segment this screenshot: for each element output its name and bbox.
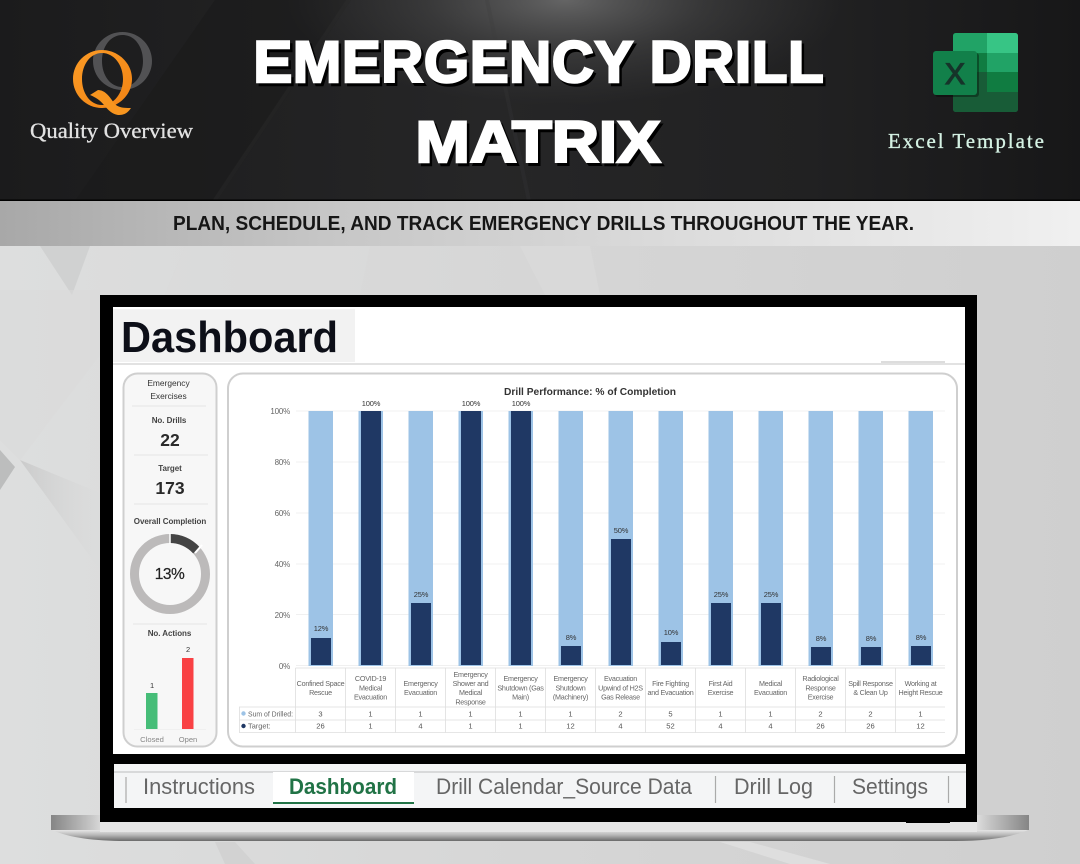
stat: number of drills: No. Drills <box>152 416 187 425</box>
data table <box>239 668 945 732</box>
bar: closed actions: Closed <box>140 735 164 744</box>
icon: grey Q ring <box>93 32 152 90</box>
legend row: target: 4 <box>718 722 723 730</box>
data labels: 25% <box>764 590 779 599</box>
legend row: sum of drilled: 2 <box>618 710 623 718</box>
category labels: COVID-19 <box>355 674 386 683</box>
category labels: Exercise <box>808 692 834 702</box>
tab: Dashboard (active) <box>273 772 414 804</box>
stat: number of drills: 22 <box>160 430 180 450</box>
category labels: Radiological <box>802 674 839 683</box>
category labels <box>297 670 943 706</box>
y axis and gridlines: 40% <box>275 560 290 569</box>
data labels: 8% <box>916 633 927 642</box>
bar chart: number of actions: No. Actions <box>148 629 192 638</box>
category labels: Medical <box>759 679 783 688</box>
legend row: sum of drilled: 1 <box>418 710 423 718</box>
data labels: 8% <box>566 633 577 642</box>
legend row: sum of drilled: 1 <box>468 710 473 718</box>
category labels: Shower and <box>453 679 489 688</box>
legend row: sum of drilled: Sum of Drilled: <box>248 710 293 718</box>
target bars (light blue) <box>308 411 933 666</box>
category labels: Response <box>805 684 836 692</box>
legend row: sum of drilled: 1 <box>368 710 373 718</box>
legend row: sum of drilled: 1 <box>718 710 723 718</box>
category labels: Shutdown <box>556 684 586 692</box>
category labels: Gas Release <box>601 692 640 702</box>
data labels: 100% <box>512 399 531 408</box>
legend row: sum of drilled: 2 <box>818 710 823 718</box>
category labels: Emergency <box>403 679 438 688</box>
data labels: 50% <box>614 526 629 535</box>
bar: closed actions <box>140 681 164 744</box>
data labels: 100% <box>462 399 481 408</box>
bar chart: number of actions <box>134 629 206 744</box>
title: EMERGENCY DRILL <box>256 33 826 98</box>
category labels: Medical <box>359 684 383 692</box>
category labels: & Clean Up <box>853 688 888 697</box>
legend row: sum of drilled: 3 <box>318 710 323 718</box>
icon: orange Q ring <box>73 50 132 115</box>
legend row: target <box>241 722 925 730</box>
category labels: Evacuation <box>754 688 787 697</box>
category labels: Upwind of H2S <box>598 684 643 692</box>
legend row: target: 52 <box>666 722 675 730</box>
panel: summary sidebar <box>124 374 216 746</box>
worksheet tab bar <box>114 764 966 808</box>
category labels: Emergency <box>503 674 538 683</box>
category labels: Evacuation <box>404 688 437 697</box>
category labels: Exercise <box>708 688 734 697</box>
category labels: Shutdown (Gas <box>497 684 544 692</box>
donut chart: overall completion: 13% <box>155 566 185 583</box>
legend row: target: Target: <box>248 722 271 730</box>
legend row: sum of drilled <box>241 710 923 718</box>
title: MATRIX <box>418 113 663 178</box>
data labels: 8% <box>866 634 877 643</box>
icon: Excel logo <box>933 33 1018 112</box>
page background <box>0 246 1080 864</box>
bar: open actions: 2 <box>186 645 190 654</box>
laptop screen frame <box>100 295 977 823</box>
y axis and gridlines: 80% <box>275 458 290 467</box>
data labels: 25% <box>714 590 729 599</box>
y axis and gridlines: 100% <box>270 407 290 416</box>
data labels: 10% <box>664 628 679 637</box>
donut chart: overall completion: Overall Completion <box>134 517 206 526</box>
tab: Instructions: Instructions <box>143 774 255 799</box>
category labels: First Aid <box>709 679 733 688</box>
legend row: sum of drilled: 2 <box>868 710 873 718</box>
category labels: Fire Fighting <box>652 679 689 688</box>
category labels: Emergency <box>553 674 588 683</box>
legend row: sum of drilled: 1 <box>918 710 923 718</box>
legend row: sum of drilled: 1 <box>568 710 573 718</box>
title: MATRIX <box>416 110 661 175</box>
stat: target: 173 <box>155 478 185 498</box>
y axis and gridlines: 20% <box>275 611 290 620</box>
legend row: target: 12 <box>916 722 925 730</box>
sidebar heading: Emergency <box>147 378 190 388</box>
category labels: Evacuation <box>604 674 637 683</box>
stat: target: Target <box>158 464 182 473</box>
icon: Excel logo: X <box>945 58 965 91</box>
tab: Settings: Settings <box>852 774 928 799</box>
category labels: Height Rescue <box>899 688 943 697</box>
category labels: Response <box>455 698 486 706</box>
stat: number of drills <box>152 416 187 450</box>
y axis and gridlines <box>270 407 945 671</box>
legend row: sum of drilled: 1 <box>768 710 773 718</box>
tab: Dashboard (active): Dashboard <box>289 774 397 799</box>
legend row: target: 26 <box>866 722 875 730</box>
legend row: target: 26 <box>316 722 325 730</box>
completed bars (navy) <box>311 411 931 665</box>
category labels: and Evacuation <box>647 688 694 697</box>
dashboard heading <box>113 309 965 364</box>
dashboard heading: Dashboard <box>121 313 338 362</box>
bar: closed actions: 1 <box>150 681 154 690</box>
category labels: (Machinery) <box>553 692 588 702</box>
category labels: Main) <box>512 692 529 702</box>
logo: Quality Overview <box>30 32 193 143</box>
legend row: sum of drilled: 5 <box>668 710 673 718</box>
subtitle band <box>0 201 1080 246</box>
data labels <box>314 399 927 643</box>
header banner <box>0 0 1080 201</box>
category labels: Evacuation <box>354 692 387 702</box>
data labels: 12% <box>314 624 329 633</box>
legend row: target: 1 <box>368 722 373 730</box>
data labels: 8% <box>816 634 827 643</box>
y axis and gridlines: 60% <box>275 509 290 518</box>
legend row: target: 26 <box>816 722 825 730</box>
category labels: Working at <box>905 679 937 688</box>
data labels: 25% <box>414 590 429 599</box>
title: EMERGENCY DRILL <box>254 30 824 95</box>
bar: open actions <box>179 645 197 744</box>
subtitle band: PLAN, SCHEDULE, AND TRACK EMERGENCY DRILLS THROUGHOUT THE YEAR. <box>173 213 914 235</box>
legend row: target: 4 <box>418 722 423 730</box>
category labels: Medical <box>459 688 483 697</box>
chart title: Drill Performance: % of Completion <box>504 386 676 398</box>
category labels: Spill Response <box>848 679 893 688</box>
donut chart: overall completion <box>134 517 206 610</box>
legend row: target: 12 <box>566 722 575 730</box>
legend row: sum of drilled: 1 <box>518 710 523 718</box>
category labels: Emergency <box>453 670 488 679</box>
category labels: Rescue <box>309 688 332 697</box>
category labels: Confined Space <box>297 679 345 688</box>
logo wordmark: Quality Overview <box>30 118 193 143</box>
Excel Template label: Excel Template <box>888 129 1044 153</box>
tab: Drill Calendar_Source Data: Drill Calendar_Source Data <box>436 774 693 799</box>
y axis and gridlines: 0% <box>279 662 290 671</box>
bar: open actions: Open <box>179 735 197 744</box>
legend row: target: 1 <box>468 722 473 730</box>
data labels: 100% <box>362 399 381 408</box>
laptop base <box>51 815 1029 841</box>
sidebar heading: Exercises <box>150 391 187 401</box>
title <box>254 30 826 178</box>
panel: drill performance chart <box>228 374 957 746</box>
stat: target <box>155 464 185 498</box>
legend row: target: 4 <box>768 722 773 730</box>
legend row: target: 4 <box>618 722 623 730</box>
tab: Drill Log: Drill Log <box>734 774 813 799</box>
legend row: target: 1 <box>518 722 523 730</box>
